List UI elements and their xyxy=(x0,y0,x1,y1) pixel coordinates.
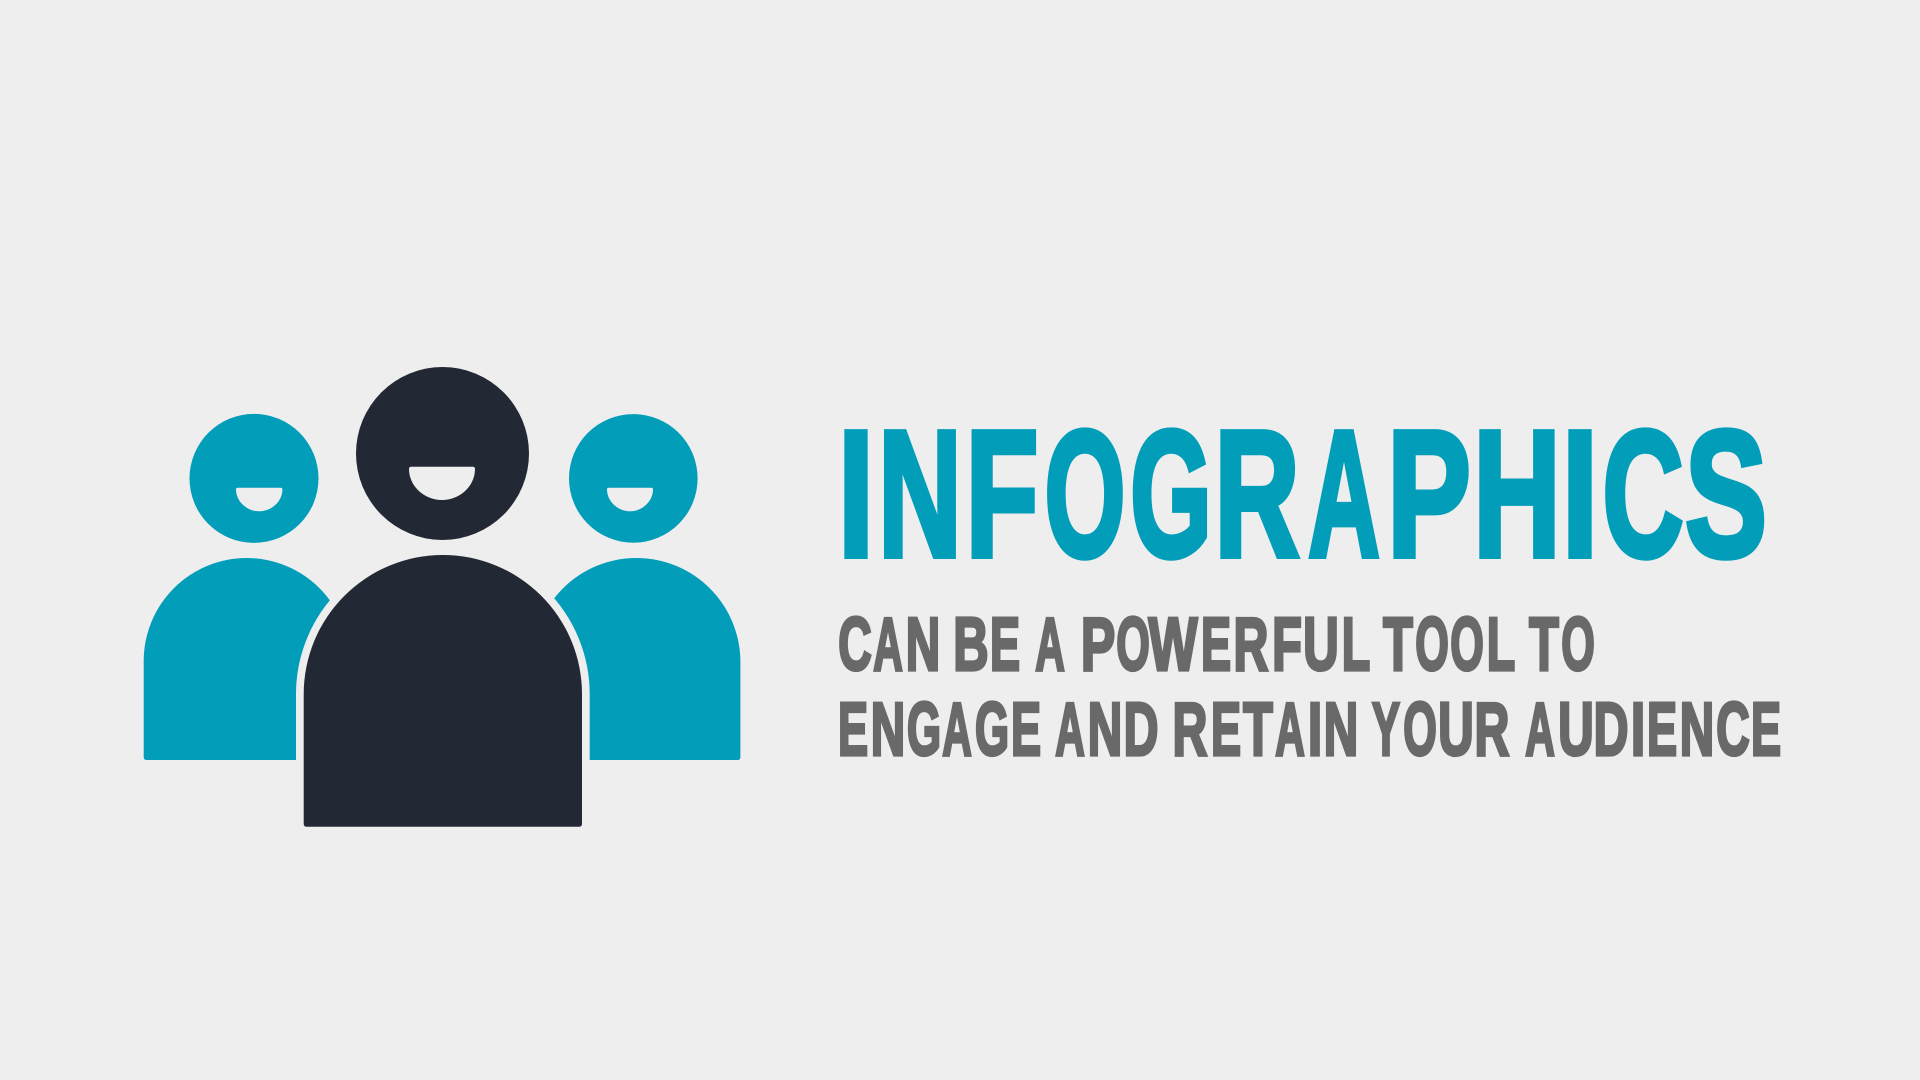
title: INFOGRAPHICS: I xyxy=(837,394,874,595)
centre person smile xyxy=(409,467,475,500)
subtitle line 2: A xyxy=(1525,687,1555,771)
subtitle line 2: A xyxy=(1275,687,1305,771)
centre person body xyxy=(304,555,582,827)
subtitle line 2: T xyxy=(1243,687,1273,771)
subtitle line 1: C xyxy=(838,602,871,686)
subtitle line 2 xyxy=(838,687,1781,771)
people icon group xyxy=(144,367,740,827)
subtitle line 1: A xyxy=(873,602,903,686)
subtitle line 2: E xyxy=(1211,687,1241,771)
title: INFOGRAPHICS: O xyxy=(1045,394,1126,595)
subtitle line 1: P xyxy=(1080,602,1115,686)
subtitle line 1: E xyxy=(990,602,1020,686)
subtitle line 2: I xyxy=(1308,687,1322,771)
title: INFOGRAPHICS: H xyxy=(1473,394,1560,595)
subtitle line 2: O xyxy=(1403,687,1436,771)
title: INFOGRAPHICS: I xyxy=(1562,394,1598,595)
title: INFOGRAPHICS xyxy=(837,394,1767,595)
title: INFOGRAPHICS: S xyxy=(1684,394,1767,595)
subtitle line 1: O xyxy=(1116,602,1150,686)
subtitle line 2: D xyxy=(1594,687,1629,771)
centre person head xyxy=(356,367,529,540)
subtitle line 2: E xyxy=(1647,687,1677,771)
subtitle line 2: C xyxy=(1716,687,1750,771)
subtitle line 1: L xyxy=(1341,602,1370,686)
subtitle line 2: E xyxy=(1010,687,1041,771)
person: centre dark xyxy=(304,367,582,827)
person: left teal xyxy=(144,414,350,760)
subtitle line 1: T xyxy=(1383,602,1413,686)
subtitle line 2: A xyxy=(1055,687,1085,771)
subtitle line 2: G xyxy=(907,687,941,771)
subtitle line 1: O xyxy=(1561,602,1595,686)
title: INFOGRAPHICS: R xyxy=(1214,394,1300,595)
subtitle line 1: B xyxy=(954,602,989,686)
subtitle line 2: D xyxy=(1124,687,1158,771)
subtitle line 2: N xyxy=(871,687,906,771)
subtitle line 2: E xyxy=(838,687,868,771)
subtitle line 2: N xyxy=(1324,687,1358,771)
subtitle line 1: U xyxy=(1303,602,1339,686)
subtitle line 1: L xyxy=(1487,602,1515,686)
subtitle line 1: O xyxy=(1450,602,1484,686)
subtitle line 2: R xyxy=(1173,687,1207,771)
subtitle line 2: I xyxy=(1631,687,1645,771)
subtitle line 2: Y xyxy=(1372,687,1400,771)
title: INFOGRAPHICS: P xyxy=(1387,394,1471,595)
subtitle line 1: A xyxy=(1035,602,1065,686)
right person head xyxy=(569,414,698,543)
left person head xyxy=(190,414,318,543)
person: right teal xyxy=(532,414,740,760)
subtitle line 1: O xyxy=(1415,602,1448,686)
subtitle line 2: G xyxy=(975,687,1009,771)
subtitle line 1: N xyxy=(906,602,940,686)
right person body xyxy=(532,558,740,760)
title: INFOGRAPHICS: A xyxy=(1308,394,1379,595)
left person smile xyxy=(236,488,282,511)
subtitle line 1 xyxy=(838,602,1595,686)
subtitle line 2: U xyxy=(1438,687,1474,771)
subtitle line 1: T xyxy=(1529,602,1559,686)
title: INFOGRAPHICS: C xyxy=(1602,394,1684,595)
title: INFOGRAPHICS: G xyxy=(1130,394,1212,595)
subtitle line 2: R xyxy=(1475,687,1509,771)
subtitle line 1: W xyxy=(1148,602,1198,686)
title: INFOGRAPHICS: N xyxy=(878,394,962,595)
subtitle line 2: U xyxy=(1558,687,1594,771)
subtitle line 1: F xyxy=(1272,602,1302,686)
subtitle line 2: E xyxy=(1751,687,1781,771)
subtitle line 1: R xyxy=(1234,602,1268,686)
left person body xyxy=(144,558,350,760)
right person smile xyxy=(607,488,653,511)
subtitle line 2: N xyxy=(1088,687,1123,771)
subtitle line 1: E xyxy=(1201,602,1231,686)
subtitle line 2: A xyxy=(942,687,972,771)
subtitle line 2: N xyxy=(1680,687,1714,771)
title: INFOGRAPHICS: F xyxy=(966,394,1038,595)
